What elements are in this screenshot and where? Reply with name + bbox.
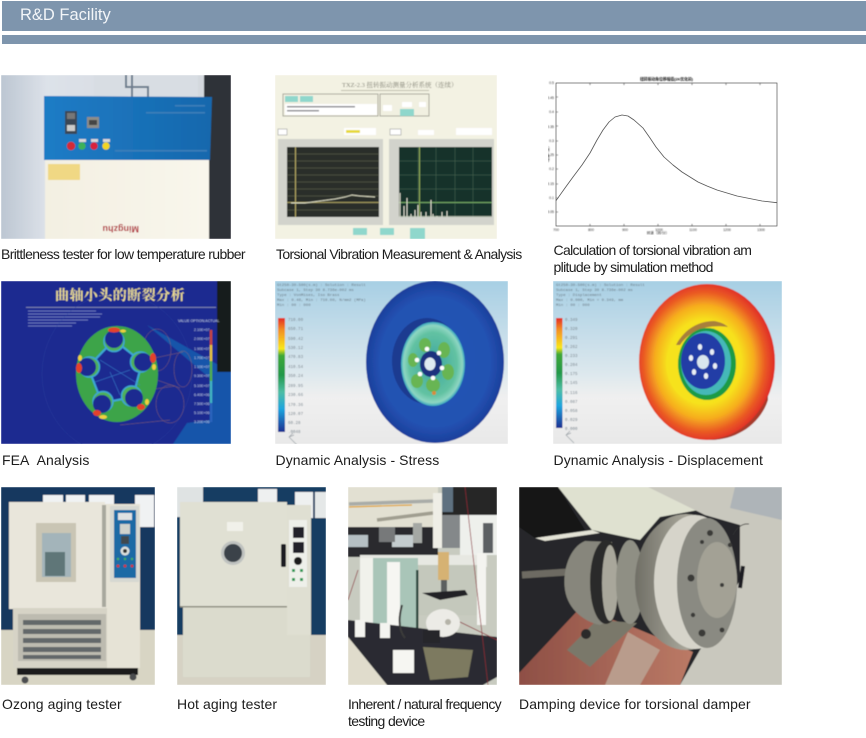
chart: torsional vibration amplitude simulation curve: 1000 bbox=[655, 228, 663, 232]
image: dynamic analysis stress wheel: 530.12 bbox=[288, 347, 304, 351]
chart: torsional vibration amplitude simulation curve: 0.5 bbox=[549, 81, 554, 85]
chart: torsional vibration amplitude simulation curve: 1100 bbox=[689, 228, 697, 232]
photo: damping device for torsional damper bbox=[519, 487, 782, 685]
image: FEA crankshaft fracture analysis: 1.70E+07 bbox=[194, 356, 210, 360]
photo: natural frequency testing device bbox=[348, 487, 497, 685]
image: dynamic analysis stress wheel: 650.71 bbox=[288, 328, 304, 332]
screenshot: torsional vibration analysis software bbox=[275, 75, 497, 239]
image: dynamic analysis stress wheel: Max : 0.46, Min : 710.00, N/mm2 (MPa) bbox=[277, 298, 366, 303]
chart: torsional vibration amplitude simulation curve: 1300 bbox=[757, 228, 765, 232]
chart: torsional vibration amplitude simulation curve: 转速（转/分） bbox=[647, 230, 669, 235]
image: dynamic analysis stress wheel: 289.95 bbox=[288, 385, 304, 389]
image: dynamic analysis displacement wheel: 0.204 bbox=[565, 364, 578, 368]
image: FEA crankshaft fracture analysis: 5.10E+06 bbox=[194, 411, 210, 415]
chart: torsional vibration amplitude simulation curve: 0.3 bbox=[549, 139, 554, 143]
image: FEA crankshaft fracture analysis: 1.90E+07 bbox=[194, 347, 210, 351]
heading bar: R&D Facility: R&D Facility bbox=[20, 6, 111, 24]
secondary header strip bbox=[2, 35, 866, 44]
image: dynamic analysis stress wheel: 230.66 bbox=[288, 394, 304, 398]
image: dynamic analysis stress wheel: 170.36 bbox=[288, 404, 304, 408]
image: dynamic analysis displacement wheel: Type : Displacement bbox=[556, 293, 602, 298]
photo: brittleness tester bbox=[1, 75, 231, 239]
image: dynamic analysis stress wheel: 350.24 bbox=[288, 375, 304, 379]
chart: torsional vibration amplitude simulation curve: 700 bbox=[553, 228, 559, 232]
image: dynamic analysis displacement wheel: 0.320 bbox=[565, 328, 578, 332]
image: FEA crankshaft fracture analysis: 9.30E+07 bbox=[194, 374, 210, 378]
screenshot: torsional vibration analysis software: TXZ-2.3 扭转振动测量分析系统（连续） bbox=[342, 80, 458, 89]
caption: Calculation of torsional vibration am bbox=[554, 242, 751, 258]
image: dynamic analysis displacement wheel: 0.029 bbox=[565, 419, 578, 423]
image: dynamic analysis stress wheel: 710.00 bbox=[288, 319, 304, 323]
caption: Dynamic Analysis - Displacement bbox=[554, 452, 763, 468]
caption: Damping device for torsional damper bbox=[519, 696, 751, 712]
image: dynamic analysis stress wheel: Subcase 1, Step 30 8.736e-002 ms bbox=[277, 288, 354, 293]
image: dynamic analysis displacement wheel: 0.058 bbox=[565, 410, 578, 414]
chart: torsional vibration amplitude simulation curve: 1200 bbox=[723, 228, 731, 232]
image: dynamic analysis displacement wheel: Max : 0.000, Min = 0.349, mm bbox=[556, 298, 624, 303]
image: dynamic analysis stress wheel: .0048 bbox=[288, 431, 301, 435]
image: FEA crankshaft fracture analysis bbox=[1, 281, 231, 444]
image: dynamic analysis displacement wheel: 0.175 bbox=[565, 373, 578, 377]
image: dynamic analysis stress wheel: 120.07 bbox=[288, 413, 304, 417]
image: dynamic analysis displacement wheel: 0.233 bbox=[565, 355, 578, 359]
image: dynamic analysis stress wheel: 470.83 bbox=[288, 356, 304, 360]
caption: Ozong aging tester bbox=[2, 696, 122, 712]
image: dynamic analysis displacement wheel: 0.145 bbox=[565, 382, 578, 386]
image: dynamic analysis displacement wheel: 0.349 bbox=[565, 319, 578, 323]
image: dynamic analysis stress wheel: Gt250-30-500(s.m) : Solution : Result bbox=[277, 283, 366, 288]
caption: testing device bbox=[348, 712, 425, 728]
caption: FEA Analysis bbox=[2, 452, 89, 468]
image: FEA crankshaft fracture analysis: 曲轴小头的断裂分析 bbox=[55, 285, 185, 305]
image: dynamic analysis stress wheel: 410.54 bbox=[288, 366, 304, 370]
image: FEA crankshaft fracture analysis: 7.50E+06 bbox=[194, 402, 210, 406]
image: dynamic analysis displacement wheel: 0.116 bbox=[565, 392, 578, 396]
heading bar: R&D Facility bbox=[2, 1, 866, 31]
image: dynamic analysis stress wheel: Min : 00 : 000 bbox=[277, 303, 311, 308]
image: FEA crankshaft fracture analysis: VALUE OPTION:ACTUAL bbox=[178, 319, 219, 323]
image: dynamic analysis displacement wheel bbox=[553, 281, 782, 444]
photo: ozone aging tester bbox=[1, 487, 155, 685]
image: dynamic analysis stress wheel: 60.28 bbox=[288, 422, 301, 426]
image: FEA crankshaft fracture analysis: 6.40E+06 bbox=[194, 393, 210, 397]
image: FEA crankshaft fracture analysis: 5.10E+07 bbox=[194, 384, 210, 388]
image: FEA crankshaft fracture analysis: 2.10E+07 bbox=[194, 328, 210, 332]
image: dynamic analysis displacement wheel: 0.000 bbox=[565, 428, 578, 432]
caption bbox=[348, 696, 502, 729]
chart: torsional vibration amplitude simulation curve: 800 bbox=[588, 228, 594, 232]
image: FEA crankshaft fracture analysis: 2.00E+07 bbox=[194, 337, 210, 341]
caption: Torsional Vibration Measurement & Analysis bbox=[276, 246, 522, 262]
image: dynamic analysis displacement wheel: 0.087 bbox=[565, 401, 578, 405]
chart: torsional vibration amplitude simulation curve bbox=[548, 76, 778, 235]
image: FEA crankshaft fracture analysis: 1.10E+07 bbox=[194, 365, 210, 369]
image: dynamic analysis stress wheel: 590.42 bbox=[288, 338, 304, 342]
caption bbox=[554, 242, 751, 275]
chart: torsional vibration amplitude simulation curve: 扭转振动角位移幅值(2K优化前) bbox=[640, 76, 694, 82]
chart: torsional vibration amplitude simulation curve: 900 bbox=[622, 228, 628, 232]
image: dynamic analysis displacement wheel: Subcase 1, Step 30 8.736e-002 ms bbox=[556, 288, 633, 293]
image: dynamic analysis displacement wheel: 0.291 bbox=[565, 337, 578, 341]
caption: Inherent / natural frequency bbox=[348, 696, 501, 712]
caption: plitude by simulation method bbox=[554, 258, 713, 274]
photo: hot aging tester bbox=[177, 487, 326, 685]
image: dynamic analysis displacement wheel: 0.262 bbox=[565, 346, 578, 350]
caption: Brittleness tester for low temperature rubber bbox=[1, 246, 245, 262]
image: dynamic analysis displacement wheel: Gt250-30-500(s.m) : Solution : Result bbox=[556, 283, 645, 288]
image: dynamic analysis displacement wheel: Min : 00 : 000 bbox=[556, 303, 590, 308]
image: dynamic analysis stress wheel bbox=[275, 281, 508, 444]
image: dynamic analysis stress wheel: Type : VonMises, Iso Brass bbox=[277, 293, 340, 298]
image: FEA crankshaft fracture analysis: 3.20E+06 bbox=[194, 420, 210, 424]
chart: torsional vibration amplitude simulation curve: 0.1 bbox=[549, 196, 554, 200]
chart: torsional vibration amplitude simulation curve: 0.4 bbox=[549, 110, 554, 114]
photo: brittleness tester: Mingzhu bbox=[102, 224, 139, 234]
caption: Hot aging tester bbox=[177, 696, 277, 712]
caption: Dynamic Analysis - Stress bbox=[276, 452, 439, 468]
chart: torsional vibration amplitude simulation curve: 0.2 bbox=[549, 167, 554, 171]
